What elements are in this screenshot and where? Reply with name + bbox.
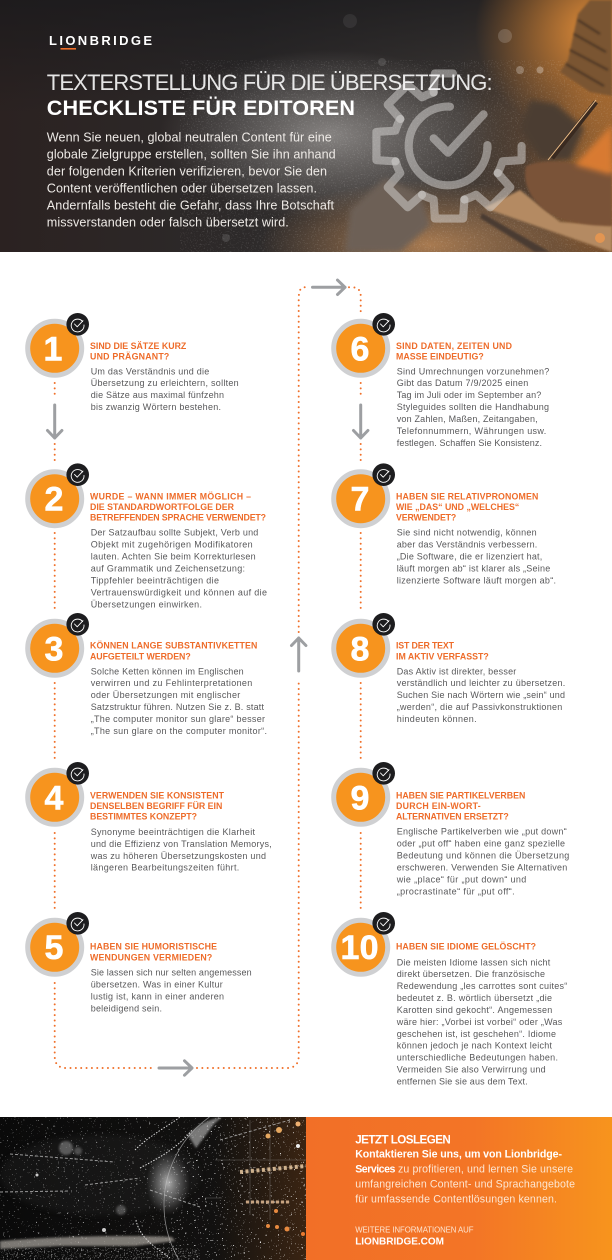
arrow: up — [292, 638, 306, 671]
body 2: Der Satzaufbau sollte Subjekt, Verb und — [91, 528, 258, 538]
body 10: direkt übersetzen. Die französische — [397, 969, 545, 979]
number circle 10: 10 — [340, 929, 378, 967]
body 7: lizenzierte Software läuft morgen ab“. — [397, 575, 556, 585]
heading 7: VERWENDET? — [396, 512, 456, 522]
check badge 6 — [372, 313, 395, 336]
intro text — [47, 130, 336, 229]
check badge 10 — [372, 912, 395, 935]
step 4 — [28, 762, 272, 873]
body 8: verständlich und leichter zu übersetzen. — [397, 678, 565, 688]
body 4: was zu höheren Übersetzungskosten und — [90, 851, 266, 861]
check badge 3 — [66, 613, 89, 636]
number circle 3: 3 — [45, 630, 63, 668]
heading 3 — [90, 641, 257, 662]
number circle 6: 6 — [351, 330, 369, 368]
heading 6: MASSE EINDEUTIG? — [396, 352, 484, 362]
intro text: Content veröffentlichen oder übersetzen lassen. — [47, 181, 317, 195]
heading 1: UND PRÄGNANT? — [90, 352, 169, 362]
body 9: Englische Partikelverben wie „put down“ — [397, 827, 567, 837]
header panel — [0, 0, 612, 252]
check badge 4 — [66, 762, 89, 785]
number circle 9 — [334, 770, 388, 824]
body 6: festlegen. Schaffen Sie Konsistenz. — [397, 438, 542, 448]
check badge 7 — [372, 463, 395, 486]
number circle 8: 8 — [351, 630, 369, 668]
body 7: aber das Verständnis verbessern. — [397, 540, 537, 550]
body 7: Sie sind nicht notwendig, können — [397, 528, 537, 538]
heading 8: IST DER TEXT — [396, 641, 455, 651]
heading 8 — [396, 641, 489, 662]
number circle 5: 5 — [45, 929, 63, 967]
heading 4: VERWENDEN SIE KONSISTENT — [90, 790, 225, 800]
body 3 — [91, 666, 267, 736]
number circle 1 — [28, 321, 82, 375]
body 1: die Sätze aus maximal fünfzehn — [91, 390, 224, 400]
body 9 — [396, 827, 569, 896]
heading 7: HABEN SIE RELATIVPRONOMEN — [396, 491, 538, 501]
CTA text: umfangreichen Content- und Sprachangebote — [355, 1179, 575, 1191]
arrow: down 1 to 2 — [48, 405, 62, 438]
body 8: hindeuten können. — [397, 714, 477, 724]
number circle 4 — [28, 770, 82, 824]
heading 5: WENDUNGEN VERMIEDEN? — [90, 952, 212, 962]
body 2: Übersetzungen einwirken. — [91, 599, 202, 609]
step 7 — [334, 463, 556, 585]
body 2: auf Grammatik und Zeichensetzung: — [91, 564, 245, 574]
intro text: der folgenden Kriterien verifizieren, bevor Sie den — [47, 164, 327, 178]
CTA heading: JETZT LOSLEGEN — [355, 1133, 451, 1146]
body 1: bis zwanzig Wörtern bestehen. — [91, 402, 221, 412]
body 10: geschehen ist, ist geschehen“. Idiome — [397, 1029, 556, 1039]
body 5: beleidigend sein. — [91, 1003, 162, 1013]
body 2: lauten. Achten Sie beim Korrekturlesen — [91, 552, 256, 562]
body 5: Sie lassen sich nur selten angemessen — [91, 968, 252, 978]
body 10: unterschiedliche Bedeutungen haben. — [397, 1053, 558, 1063]
check badge 5 — [66, 912, 89, 935]
step 1 — [28, 313, 239, 412]
body 2: Objekt mit zugehörigen Modifikatoren — [91, 540, 253, 550]
CTA text — [355, 1149, 575, 1206]
step 9 — [334, 762, 569, 896]
CTA text: zu profitieren, und lernen Sie unsere — [398, 1164, 573, 1176]
step 5 — [28, 912, 252, 1013]
body 3: „The computer monitor sun glare“ besser — [91, 714, 265, 724]
heading 9 — [396, 790, 525, 822]
heading 6 — [396, 341, 512, 362]
body 1: Übersetzung zu erleichtern, sollten — [91, 378, 239, 388]
arrow: right along top — [312, 280, 345, 294]
intro text: Wenn Sie neuen, global neutralen Content für eine — [47, 130, 332, 144]
body 8: Das Aktiv ist direkter, besser — [397, 666, 516, 676]
step 8 — [334, 613, 565, 724]
body 3: verwirren und zu Fehlinterpretationen — [91, 678, 252, 688]
arrow: right along bottom — [159, 1061, 192, 1075]
body 9: oder „put off“ haben eine ganz spezielle — [397, 839, 565, 849]
heading 5: HABEN SIE HUMORISTISCHE — [90, 942, 217, 952]
body 7 — [397, 528, 556, 585]
heading 4 — [90, 790, 225, 822]
body 4: Synonyme beeinträchtigen die Klarheit — [91, 827, 255, 837]
dotted connector path — [55, 287, 361, 1068]
CTA text: für umfassende Contentlösungen kennen. — [355, 1194, 557, 1206]
body 8: Suchen Sie nach Wörtern wie „sein“ und — [397, 690, 565, 700]
body 3: „The sun glare on the computer monitor“. — [91, 726, 267, 736]
body 3: Satzstruktur führen. Nutzen Sie z. B. statt — [91, 702, 264, 712]
heading 2: DIE STANDARDWORTFOLGE DER — [90, 502, 235, 512]
website link: WEITERE INFORMATIONEN AUF — [355, 1226, 474, 1235]
heading 4: DENSELBEN BEGRIFF FÜR EIN — [90, 801, 222, 811]
heading 9: DURCH EIN-WORT- — [396, 801, 481, 811]
number circle 2: 2 — [45, 480, 63, 518]
CTA text: Kontaktieren Sie uns, um von Lionbridge- — [355, 1149, 562, 1161]
heading 5 — [90, 942, 217, 962]
heading 1 — [90, 341, 187, 362]
body 10: entfernen Sie sie aus dem Text. — [397, 1076, 528, 1086]
body 10: bedeutet z. B. wörtlich übersetzt „die — [397, 993, 552, 1003]
step 2 — [28, 463, 267, 609]
number circle 6 — [334, 321, 388, 375]
heading 6: SIND DATEN, ZEITEN UND — [396, 341, 512, 351]
heading 7 — [396, 491, 538, 522]
number circle 5 — [28, 920, 82, 974]
CTA text: Services — [355, 1164, 395, 1176]
title — [47, 70, 493, 120]
body 8 — [397, 666, 565, 724]
body 3: oder Übersetzungen mit englischer — [91, 690, 240, 700]
heading 2 — [90, 491, 266, 522]
body 6 — [397, 366, 549, 448]
check badge 2 — [66, 463, 89, 486]
body 6: von Zahlen, Maßen, Zeitangaben, — [397, 414, 538, 424]
check badge 9 — [372, 762, 395, 785]
body 9: „procrastinate“ für „put off“. — [397, 886, 515, 896]
body 7: läuft morgen ab“ ist klarer als „Seine — [397, 564, 550, 574]
heading 8: IM AKTIV VERFASST? — [396, 652, 489, 662]
body 5: lustig ist, kann in einer anderen — [91, 992, 224, 1002]
body 8: „werden“, die auf Passivkonstruktionen — [397, 702, 562, 712]
heading 1: SIND DIE SÄTZE KURZ — [90, 341, 187, 351]
body 2: Tippfehler beeinträchtigen die — [91, 575, 219, 585]
body 1: Um das Verständnis und die — [91, 366, 209, 376]
intro text: globale Zielgruppe erstellen, sollten Sie ihn anhand — [47, 147, 336, 161]
intro text: missverstanden oder falsch übersetzt wird. — [47, 215, 289, 229]
body 10: können jedoch je nach Kontext leicht — [397, 1041, 552, 1051]
header photo background — [0, 0, 612, 252]
body 4: längeren Bearbeitungszeiten führt. — [91, 863, 239, 873]
number circle 10 — [334, 920, 388, 974]
body 3: Solche Ketten können im Englischen — [91, 666, 244, 676]
heading 2: BETREFFENDEN SPRACHE VERWENDET? — [90, 512, 266, 522]
heading 3: KÖNNEN LANGE SUBSTANTIVKETTEN — [90, 641, 257, 651]
heading 4: BESTIMMTES KONZEPT? — [90, 812, 197, 822]
body 6: Gibt das Datum 7/9/2025 einen — [397, 378, 528, 388]
call to action panel — [306, 1117, 612, 1260]
body 2: Vertrauenswürdigkeit und können auf die — [91, 587, 267, 597]
body 6: Tag im Juli oder im September an? — [397, 390, 541, 400]
title: TEXTERSTELLUNG FÜR DIE ÜBERSETZUNG: — [47, 70, 493, 95]
body 10: wäre hier: „Vorbei ist vorbei“ oder „Was — [396, 1017, 563, 1027]
website link — [355, 1226, 474, 1248]
body 5: übersetzen. Was in einer Kultur — [91, 980, 223, 990]
footer image: digital globe — [0, 1117, 306, 1260]
body 10: Vermeiden Sie also Verwirrung und — [397, 1064, 546, 1074]
step 6 — [334, 313, 549, 448]
body 2 — [91, 528, 267, 609]
heading 2: WURDE – WANN IMMER MÖGLICH – — [90, 491, 251, 501]
body 1 — [91, 366, 239, 412]
number circle 7: 7 — [351, 480, 369, 518]
number circle 3 — [28, 621, 82, 675]
number circle 4: 4 — [45, 780, 64, 818]
number circle 2 — [28, 472, 82, 526]
body 6: Telefonnummern, Währungen usw. — [397, 426, 546, 436]
body 5 — [91, 968, 252, 1013]
check badge 1 — [66, 313, 89, 336]
arrow: down 6 to 7 — [354, 405, 368, 438]
body 7: „Die Software, die er lizenziert hat, — [397, 552, 542, 562]
body 4 — [90, 827, 272, 873]
body 10: Die meisten Idiome lassen sich nicht — [397, 957, 551, 967]
body 10: Redewendung „les carrottes sont cuites“ — [397, 981, 567, 991]
number circle 8 — [334, 621, 388, 675]
body 6: Styleguides sollten die Handhabung — [397, 402, 549, 412]
heading 9: HABEN SIE PARTIKELVERBEN — [396, 790, 525, 800]
body 9: wie „place“ für „put down“ und — [396, 874, 526, 884]
number circle 1: 1 — [44, 331, 62, 369]
number circle 7 — [334, 472, 388, 526]
number circle 9: 9 — [351, 780, 369, 818]
title: CHECKLISTE FÜR EDITOREN — [47, 95, 355, 120]
gear icon — [376, 73, 522, 219]
body 10: Karotten sind gekocht“. Angemessen — [397, 1005, 552, 1015]
heading 9: ALTERNATIVEN ERSETZT? — [396, 812, 509, 822]
body 9: Bedeutung und können die Übersetzung — [397, 850, 569, 860]
body 4: und die Effizienz von Translation Memorys, — [91, 839, 272, 849]
step 3 — [28, 613, 267, 736]
heading 3: AUFGETEILT WERDEN? — [90, 652, 191, 662]
body 9: erschweren. Verwenden Sie Alternativen — [397, 862, 567, 872]
body 6: Sind Umrechnungen vorzunehmen? — [397, 366, 549, 376]
check badge 8 — [372, 613, 395, 636]
logo: LIONBRIDGE — [49, 33, 152, 48]
body 10 — [396, 957, 567, 1086]
intro text: Andernfalls besteht die Gefahr, dass Ihre Botschaft — [47, 198, 335, 212]
step 10 — [334, 912, 567, 1086]
heading 7: WIE „DAS“ UND „WELCHES“ — [396, 502, 519, 512]
heading 10: HABEN SIE IDIOME GELÖSCHT? — [396, 942, 536, 952]
website link: LIONBRIDGE.COM — [355, 1237, 444, 1248]
